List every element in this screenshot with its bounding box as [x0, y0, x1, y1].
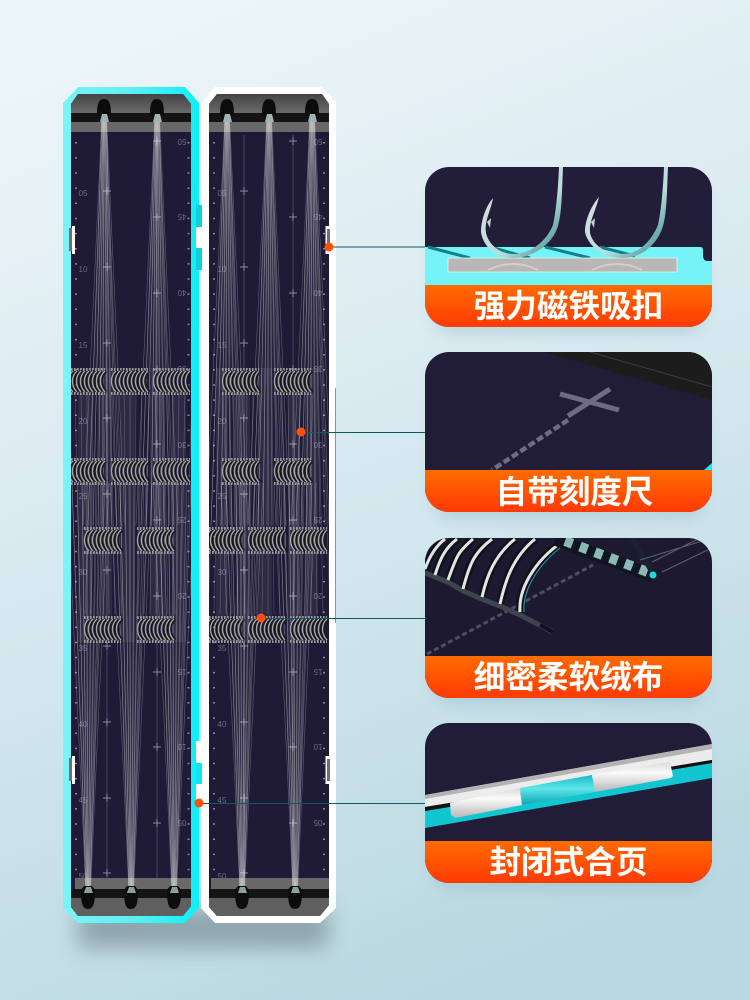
product: left cyan box: 20	[79, 417, 88, 426]
product: left cyan box: 40	[79, 720, 88, 729]
callout line: cloth	[256, 614, 426, 622]
product: left cyan box: 20	[177, 591, 186, 600]
hook reflections	[488, 264, 642, 270]
hinges between boxes	[196, 205, 202, 806]
ruler cross	[560, 389, 619, 416]
icon: right hook barb	[591, 218, 595, 228]
hinge: white right	[592, 762, 673, 792]
cyan base edge	[425, 763, 712, 828]
product: right white box: 35	[218, 644, 227, 653]
product: right white box: 15	[313, 667, 322, 676]
product: right white box: 10	[313, 742, 322, 751]
product: right white box: 25	[218, 492, 227, 501]
product: right white box: 50	[218, 872, 227, 881]
panel: built-in ruler	[425, 352, 712, 512]
ruler dots	[427, 565, 593, 654]
product: right white box: 25	[313, 515, 322, 524]
product: left cyan box: 45	[79, 796, 88, 805]
silver plate	[448, 258, 677, 272]
black tray corner	[543, 352, 712, 400]
product: right white box: 05	[313, 818, 322, 827]
product: right white box: 15	[218, 341, 227, 350]
orange caption bar	[425, 656, 712, 698]
shadow under boxes	[78, 908, 328, 948]
caption: 封闭式合页	[490, 844, 647, 880]
panel: closed hinge	[425, 723, 712, 883]
product: left cyan box: 10	[79, 265, 88, 274]
panel shadows	[432, 180, 706, 890]
product: left cyan box: 35	[79, 644, 88, 653]
product: right white box: 40	[218, 720, 227, 729]
product: left cyan box: 35	[177, 364, 186, 373]
product: left cyan box: 40	[177, 288, 186, 297]
icon: cyan box edge	[425, 247, 712, 285]
orange caption bar	[425, 841, 712, 883]
product: right white box: 35	[313, 364, 322, 373]
product: left cyan box: 05	[177, 818, 186, 827]
hinge: cyan centre	[520, 775, 595, 805]
product: left cyan box: 50	[177, 137, 186, 146]
product: left cyan box: 10	[177, 742, 186, 751]
product: right white box: 30	[313, 440, 322, 449]
panel: strong magnetic clasp	[425, 167, 712, 327]
orange caption bar	[425, 470, 712, 512]
product: right white box: 50	[313, 137, 322, 146]
product: left cyan box: 30	[79, 568, 88, 577]
icon: left hook barb	[487, 218, 491, 228]
product: left cyan box: 45	[177, 212, 186, 221]
product: right white box: 40	[313, 288, 322, 297]
latches on box edges	[69, 226, 330, 784]
caption: 强力磁铁吸扣	[474, 288, 663, 324]
small hooks cluster	[555, 538, 712, 578]
product: left cyan box: 50	[79, 872, 88, 881]
product: right white box: 05	[218, 189, 227, 198]
product: left cyan box: 15	[177, 667, 186, 676]
callout line: ruler	[296, 428, 426, 436]
caption: 细密柔软绒布	[474, 659, 663, 695]
product: right white box	[201, 87, 336, 923]
cyan corner	[704, 463, 712, 470]
product: left cyan box: 25	[177, 515, 186, 524]
hook wires	[425, 539, 570, 632]
product: right white box: 45	[313, 212, 322, 221]
product: left cyan box: 15	[79, 341, 88, 350]
product: right white box: 20	[218, 417, 227, 426]
callout line: hinge	[194, 798, 426, 808]
product: right white box: 20	[313, 591, 322, 600]
icon: left hook	[481, 167, 563, 258]
hinge: white left	[450, 788, 522, 818]
product: right white box: 10	[218, 265, 227, 274]
orange caption bar	[425, 285, 712, 327]
caption: 自带刻度尺	[496, 474, 653, 510]
product: right white box: 45	[218, 796, 227, 805]
callout bracket line	[334, 388, 336, 623]
ruler dashes	[492, 420, 568, 470]
icon: right hook	[585, 167, 668, 258]
product: left cyan box: 25	[79, 492, 88, 501]
product: left cyan box	[63, 87, 199, 923]
diagonal teal stripes	[428, 247, 635, 258]
callout line: magnetic clasp	[324, 242, 426, 252]
product: left cyan box: 05	[79, 189, 88, 198]
tray edge highlight	[590, 352, 712, 387]
product: right white box: 30	[218, 568, 227, 577]
product: left cyan box: 30	[177, 440, 186, 449]
panel: fine soft velvet	[425, 538, 712, 698]
white lid edge	[425, 744, 712, 807]
